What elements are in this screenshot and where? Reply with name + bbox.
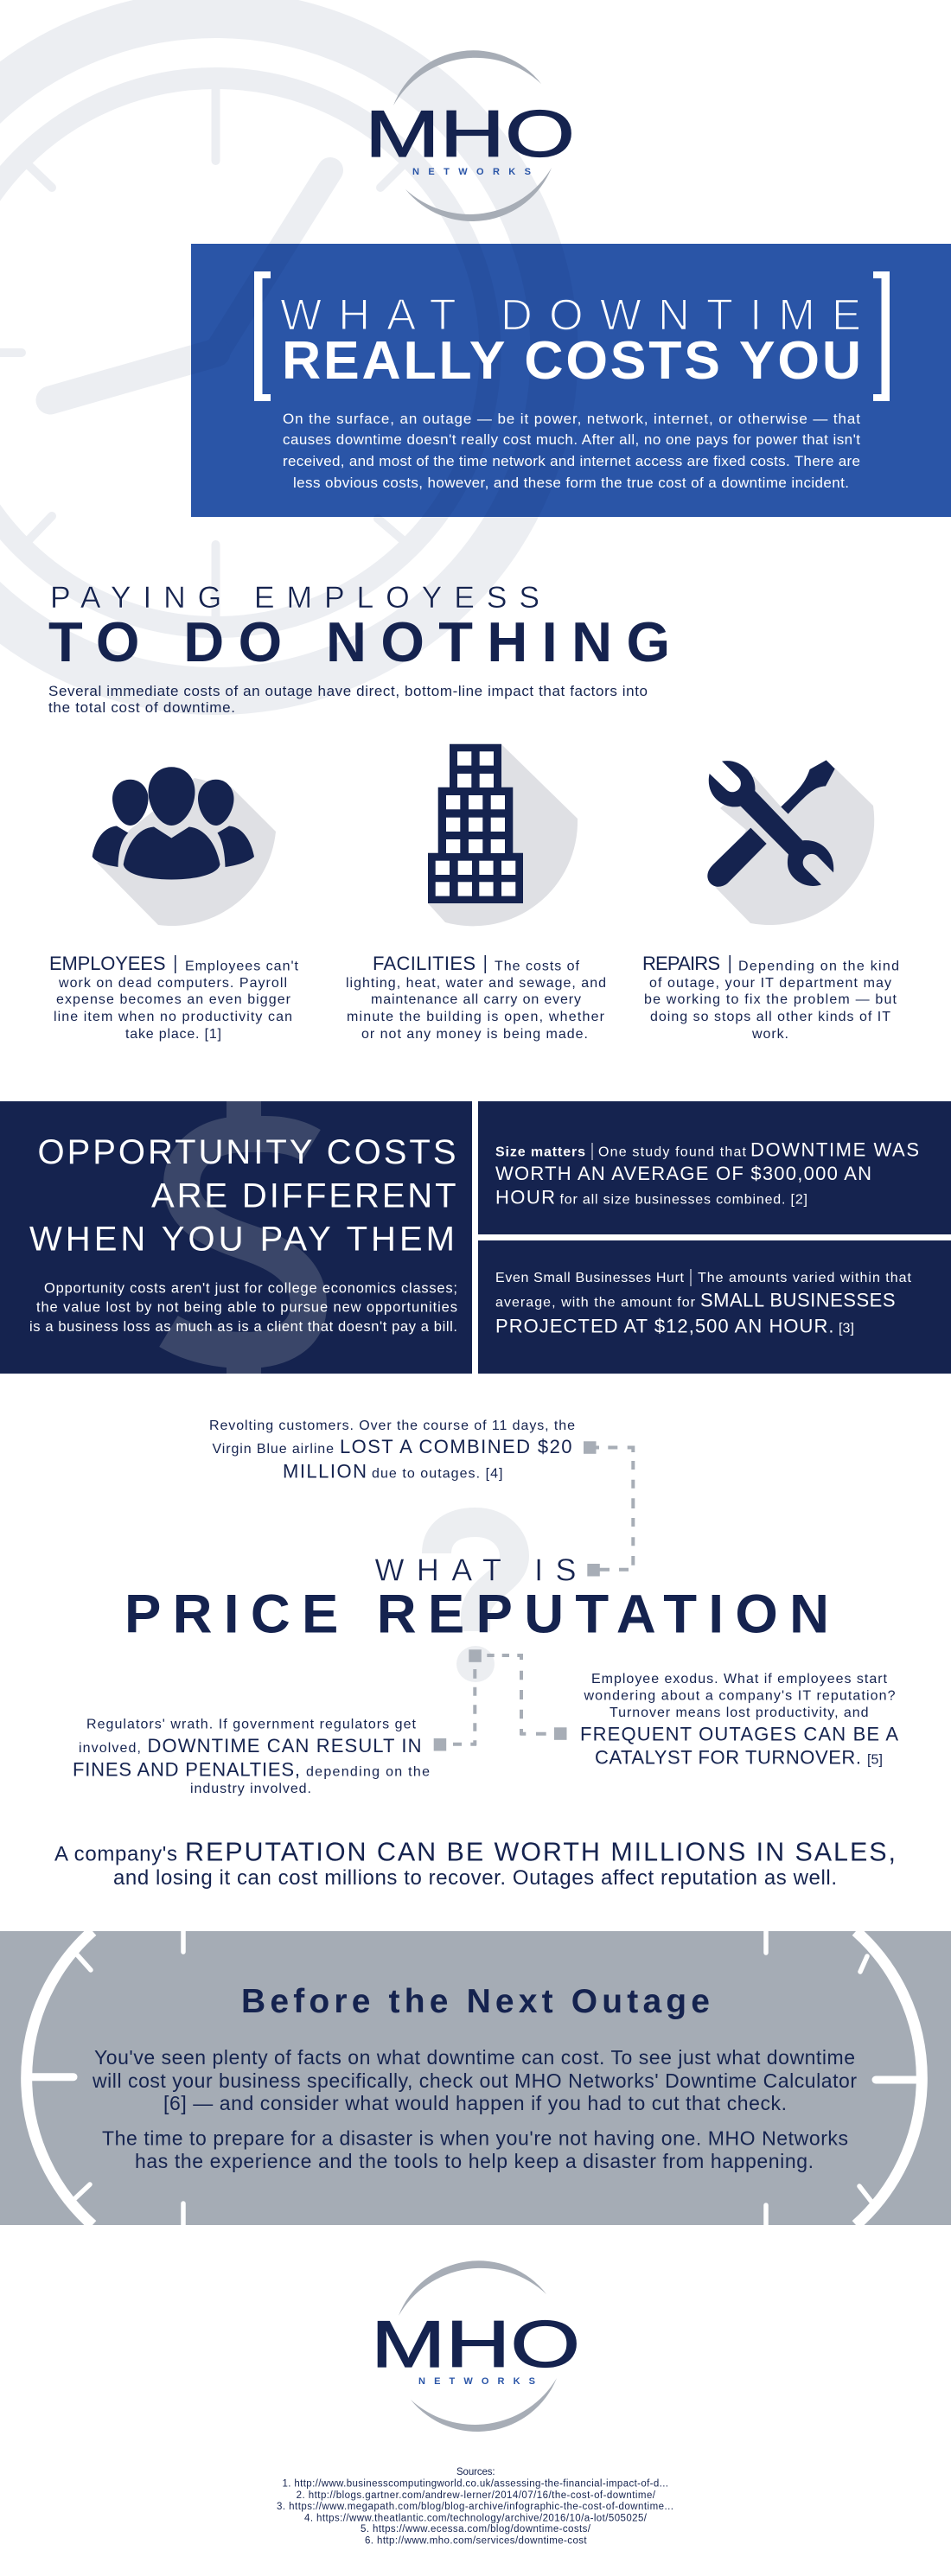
panel: size matters: HOUR bbox=[495, 1187, 555, 1208]
sources: 3. https://www.megapath.com/blog/blog-archive/infographic-the-cost-of-downtime... bbox=[277, 2502, 673, 2512]
panel: small businesses: SMALL BUSINESSES bbox=[700, 1290, 896, 1311]
panel: size matters: Size matters bbox=[495, 1145, 585, 1160]
panel: small businesses: Even Small Businesses Hurt bbox=[495, 1271, 685, 1285]
callout: regulators: DOWNTIME CAN RESULT IN bbox=[147, 1735, 422, 1757]
text block: employees bbox=[49, 953, 299, 1042]
top logo: NETWORKS bbox=[412, 167, 531, 177]
callout: revolting customers: Virgin Blue airline bbox=[213, 1442, 334, 1457]
callout: revolting customers: MILLION bbox=[283, 1461, 367, 1482]
panel: size matters: DOWNTIME WAS bbox=[750, 1139, 919, 1161]
panel: opportunity costs bbox=[0, 1101, 472, 1374]
title bbox=[280, 290, 861, 391]
text block: repairs: of outage, your IT department may bbox=[649, 976, 891, 991]
icon: question mark bbox=[437, 1522, 514, 1682]
intro text: received, and most of the time network and internet access are fixed costs. There are bbox=[283, 453, 860, 469]
connector: customers bbox=[584, 1441, 635, 1577]
heading: WHEN YOU PAY THEM bbox=[29, 1221, 455, 1259]
text block: repairs: REPAIRS bbox=[642, 953, 720, 974]
heading: OPPORTUNITY COSTS bbox=[38, 1133, 456, 1171]
sources bbox=[277, 2467, 673, 2547]
callout: revolting customers: Revolting customers. Over the course of 11 days, the bbox=[209, 1419, 575, 1433]
statement: reputation worth: A company's bbox=[54, 1843, 177, 1866]
intro text: less obvious costs, however, and these form the true cost of a downtime incident. bbox=[293, 475, 849, 491]
section intro text bbox=[48, 683, 648, 716]
sources: 5. https://www.ecessa.com/blog/downtime-costs/ bbox=[361, 2524, 591, 2535]
heading: paying employess bbox=[48, 580, 670, 673]
intro text: causes downtime doesn't really cost much. After all, no one pays for power that isn't bbox=[283, 431, 860, 448]
heading: paying employess: TO DO NOTHING bbox=[48, 610, 670, 673]
sources: 4. https://www.theatlantic.com/technology/archive/2016/10/a-lot/505025/ bbox=[304, 2514, 648, 2524]
statement: reputation worth: and losing it can cost millions to recover. Outages affect reputation as well. bbox=[113, 1866, 837, 1890]
left bracket bbox=[254, 271, 271, 401]
sources: 1. http://www.businesscomputingworld.co.uk/assessing-the-financial-impact-of-d... bbox=[282, 2479, 668, 2490]
text block: repairs: doing so stops all other kinds of IT bbox=[650, 1010, 890, 1024]
body text: The time to prepare for a disaster is when you're not having one. MHO Networks bbox=[102, 2127, 848, 2150]
body text bbox=[92, 2046, 857, 2172]
panel: small businesses: The amounts varied within that bbox=[698, 1271, 912, 1285]
text block: repairs bbox=[642, 953, 899, 1042]
callout: regulators: Regulators' wrath. If government regulators get bbox=[86, 1718, 417, 1732]
sources: Sources: bbox=[456, 2467, 495, 2477]
heading: price reputation bbox=[124, 1552, 829, 1644]
callout: regulators bbox=[73, 1718, 430, 1796]
body text: You've seen plenty of facts on what downtime can cost. To see just what downtime bbox=[94, 2046, 855, 2069]
body text: has the experience and the tools to help keep a disaster from happening. bbox=[135, 2150, 814, 2172]
icon: tools bbox=[707, 760, 874, 925]
text block: facilities: maintenance all carry on every bbox=[371, 992, 581, 1007]
body text: Opportunity costs aren't just for college economics classes; bbox=[44, 1281, 457, 1297]
body text: will cost your business specifically, check out MHO Networks' Downtime Calculator bbox=[92, 2069, 857, 2092]
callout: employee exodus: FREQUENT OUTAGES CAN BE A bbox=[580, 1724, 898, 1745]
body text: is a business loss as much as is a client that doesn't pay a bill. bbox=[29, 1319, 457, 1335]
section intro text: Several immediate costs of an outage have direct, bottom-line impact that factors into bbox=[48, 683, 648, 699]
callout: employee exodus: Employee exodus. What if employees start bbox=[591, 1672, 888, 1687]
body text: [6] — and consider what would happen if you had to cut that check. bbox=[163, 2092, 787, 2114]
panel: small businesses bbox=[478, 1240, 951, 1374]
icon: dollar sign bbox=[169, 1101, 311, 1374]
heading: price reputation: PRICE REPUTATION bbox=[124, 1584, 829, 1644]
panel: intro bbox=[191, 244, 951, 517]
sources: 6. http://www.mho.com/services/downtime-cost bbox=[365, 2536, 587, 2547]
title: WHAT DOWNTIME bbox=[280, 290, 861, 339]
callout: regulators: depending on the bbox=[306, 1765, 430, 1780]
callout: employee exodus: CATALYST FOR TURNOVER. bbox=[595, 1746, 861, 1769]
text block: facilities: FACILITIES bbox=[373, 953, 476, 974]
callout: employee exodus: [5] bbox=[867, 1753, 883, 1767]
panel: size matters bbox=[478, 1101, 951, 1234]
body text: the value lost by not being able to pursue new opportunities bbox=[36, 1300, 457, 1316]
callout: employee exodus bbox=[580, 1672, 898, 1769]
text block: facilities: or not any money is being made. bbox=[361, 1027, 588, 1042]
sources: 2. http://blogs.gartner.com/andrew-lerner/2014/07/16/the-cost-of-downtime/ bbox=[297, 2490, 656, 2501]
heading: price reputation: WHAT IS bbox=[375, 1552, 576, 1587]
callout: revolting customers bbox=[209, 1419, 575, 1482]
text block: facilities: lighting, heat, water and sewage, and bbox=[346, 976, 606, 991]
panel: before the next outage bbox=[0, 1928, 951, 2228]
callout: revolting customers: due to outages. [4] bbox=[372, 1466, 503, 1482]
clock faces bbox=[27, 1928, 922, 2228]
heading: paying employess: PAYING EMPLOYESS bbox=[50, 580, 539, 615]
text block: facilities: The costs of bbox=[495, 960, 580, 973]
bottom logo: MHO bbox=[371, 2308, 580, 2382]
heading bbox=[29, 1133, 456, 1259]
panel: small businesses: [3] bbox=[839, 1322, 854, 1336]
statement: reputation worth: REPUTATION CAN BE WORTH MILLIONS IN SALES, bbox=[185, 1838, 896, 1867]
section intro text: the total cost of downtime. bbox=[48, 699, 235, 716]
title: REALLY COSTS YOU bbox=[282, 330, 861, 391]
icon: employees bbox=[93, 767, 276, 926]
panel: size matters: WORTH AN AVERAGE OF $300,000 AN bbox=[495, 1163, 871, 1184]
intro text bbox=[283, 411, 860, 491]
background clock watermark bbox=[0, 14, 554, 692]
callout: revolting customers: LOST A COMBINED $20 bbox=[340, 1436, 572, 1457]
text block: employees: expense becomes an even bigger bbox=[56, 992, 291, 1007]
heading: ARE DIFFERENT bbox=[151, 1177, 456, 1215]
top logo bbox=[365, 50, 575, 221]
text block: employees: EMPLOYEES bbox=[49, 953, 166, 974]
panel: size matters: for all size businesses combined. [2] bbox=[560, 1193, 807, 1208]
text block: repairs: Depending on the kind bbox=[738, 960, 899, 973]
top logo: MHO bbox=[365, 98, 575, 171]
text block: facilities bbox=[346, 953, 606, 1042]
panel: small businesses: PROJECTED AT $12,500 AN HOUR. bbox=[495, 1316, 833, 1337]
callout: regulators: FINES AND PENALTIES, bbox=[73, 1759, 300, 1781]
right bracket bbox=[873, 271, 890, 401]
text block: employees: take place. [1] bbox=[125, 1027, 221, 1042]
bottom logo: NETWORKS bbox=[418, 2376, 535, 2387]
text block: repairs: work. bbox=[751, 1027, 788, 1042]
callout: employee exodus: Turnover means lost productivity, and bbox=[610, 1706, 868, 1720]
text block: repairs: be working to fix the problem — but bbox=[644, 992, 897, 1007]
bottom logo bbox=[371, 2260, 580, 2432]
text block: employees: line item when no productivity can bbox=[54, 1010, 292, 1024]
text block: facilities: minute the building is open, whether bbox=[347, 1010, 605, 1024]
body text bbox=[29, 1281, 457, 1335]
statement: reputation worth bbox=[54, 1838, 896, 1890]
heading: Before the Next Outage bbox=[241, 1983, 710, 2020]
panel: size matters: One study found that bbox=[598, 1145, 747, 1160]
text block: employees: work on dead computers. Payroll bbox=[58, 976, 287, 991]
panel: small businesses: average, with the amount for bbox=[495, 1296, 696, 1310]
text block: employees: Employees can't bbox=[185, 960, 299, 973]
icon: building bbox=[428, 744, 578, 926]
callout: employee exodus: wondering about a company's IT reputation? bbox=[583, 1689, 896, 1704]
connector: turnover and regulators bbox=[434, 1649, 567, 1751]
intro text: On the surface, an outage — be it power, network, internet, or otherwise — that bbox=[283, 411, 860, 427]
callout: regulators: industry involved. bbox=[190, 1782, 311, 1796]
callout: regulators: involved, bbox=[79, 1741, 141, 1756]
